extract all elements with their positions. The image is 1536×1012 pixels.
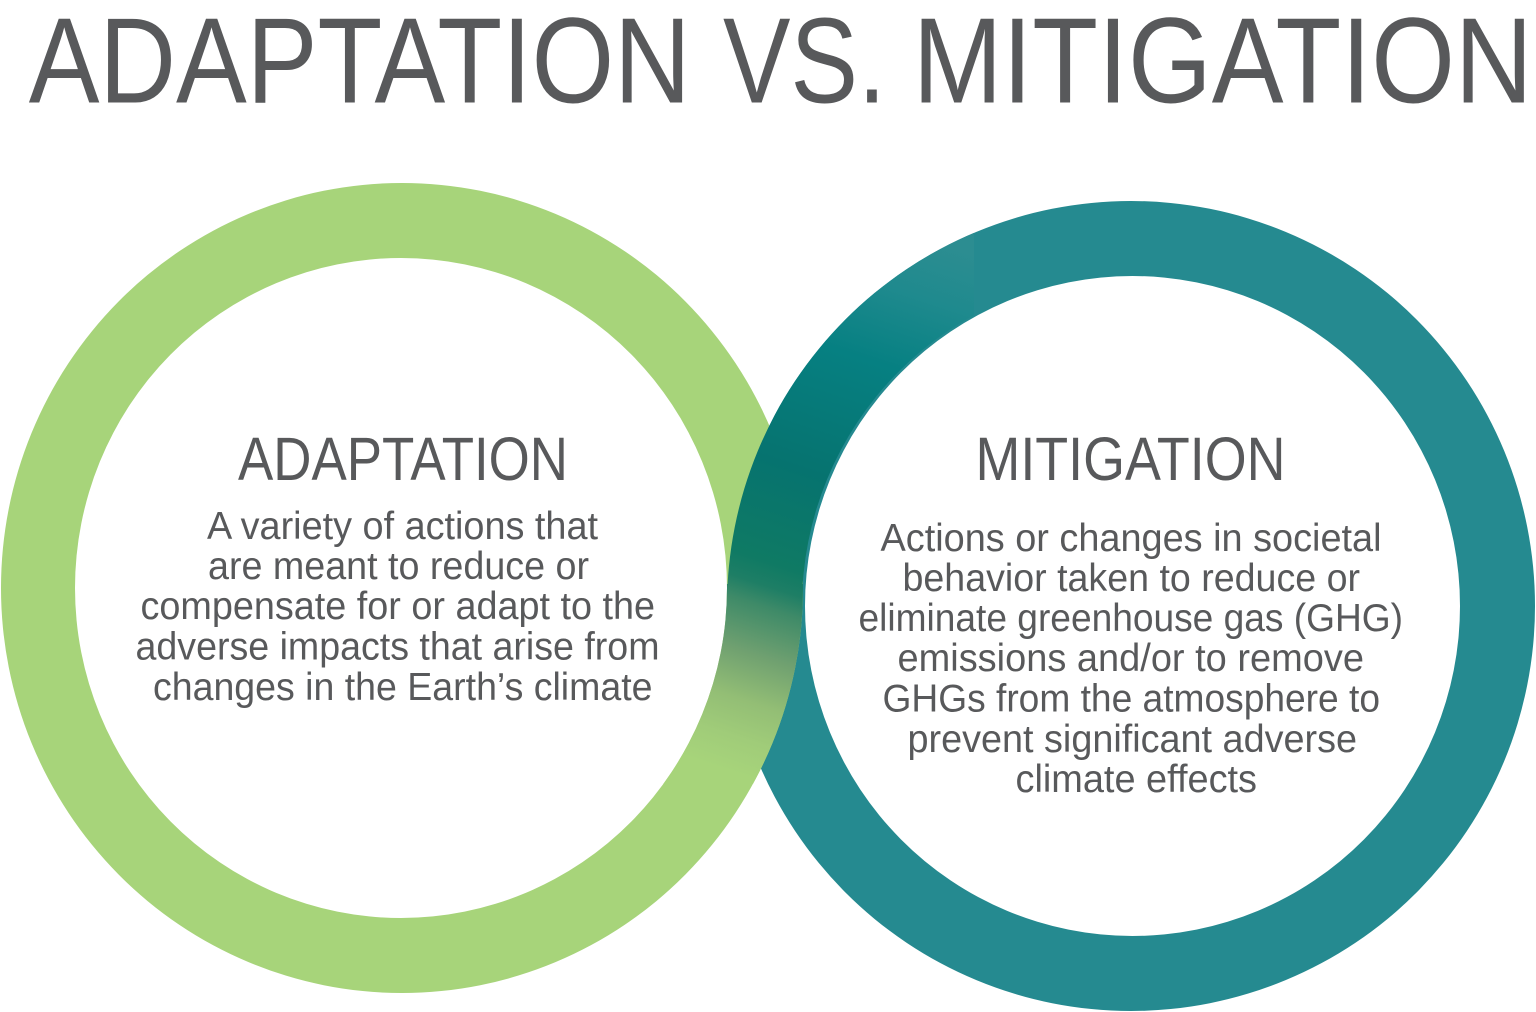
panel: mitigation text	[858, 425, 1403, 801]
panel: adaptation text	[136, 425, 660, 709]
text block: adaptation definition: adverse impacts that arise from	[136, 626, 660, 668]
text block: mitigation definition: climate effects	[1016, 758, 1257, 801]
text block: adaptation definition: A variety of actions that	[207, 505, 598, 548]
text block: mitigation definition: eliminate greenhouse gas (GHG)	[858, 597, 1403, 640]
ring overlap: gradient lower arc	[663, 584, 803, 784]
text block: mitigation definition: emissions and/or to remove	[898, 637, 1364, 680]
title	[29, 0, 1533, 128]
text block: adaptation definition	[136, 505, 660, 709]
adaptation ring hole cover	[75, 258, 727, 918]
text block: mitigation definition	[858, 517, 1403, 801]
text block: adaptation definition: are meant to reduce or	[208, 545, 589, 588]
text block: mitigation definition: behavior taken to reduce or	[902, 557, 1360, 600]
ring: mitigation	[727, 201, 1535, 1011]
text block: mitigation definition: prevent significant adverse	[908, 718, 1357, 761]
text block: mitigation definition: Actions or changes in societal	[880, 517, 1382, 560]
ring: adaptation	[1, 183, 803, 993]
text block: mitigation definition: GHGs from the atmosphere to	[882, 678, 1380, 720]
text block: adaptation definition: changes in the Earth’s climate	[153, 666, 652, 709]
text block: adaptation definition: compensate for or adapt to the	[140, 585, 655, 628]
ring overlap: teal upper arc	[728, 232, 974, 584]
heading: mitigation: MITIGATION	[976, 425, 1286, 493]
heading: adaptation: ADAPTATION	[238, 425, 568, 493]
